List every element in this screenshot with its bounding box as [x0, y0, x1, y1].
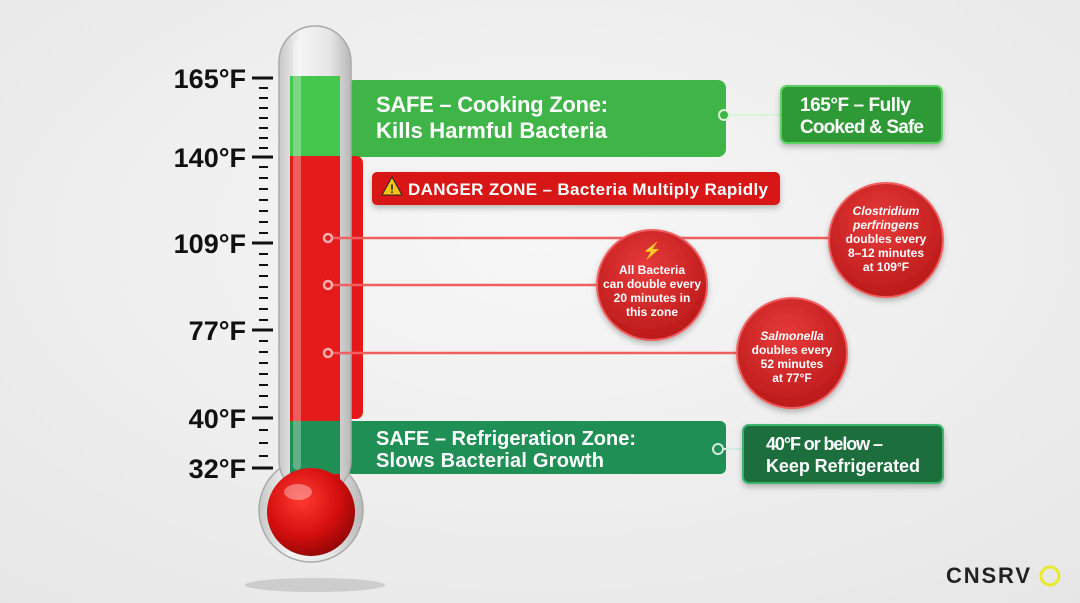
thermometer scale labels: 109°F — [174, 229, 246, 259]
callout: 40F keep refrigerated: 40°F or below – — [766, 434, 883, 454]
thermometer scale labels — [174, 64, 246, 484]
callout circle: Clostridium: at 109°F — [863, 260, 909, 274]
thermometer scale labels: 40°F — [189, 404, 246, 434]
callout circle: all bacteria: All Bacteria — [619, 263, 685, 277]
callout circle: all bacteria — [597, 230, 707, 340]
callout circle: all bacteria: ⚡ — [642, 241, 662, 260]
callout: 165F fully cooked: Cooked & Safe — [800, 117, 924, 138]
callout: 40F keep refrigerated — [743, 425, 943, 483]
callout circle: Salmonella: at 77°F — [772, 371, 812, 385]
callout circle: all bacteria: this zone — [626, 305, 678, 319]
thermometer ticks — [252, 78, 273, 468]
danger zone label: ! — [390, 182, 394, 196]
callout circle: Clostridium: perfringens — [852, 218, 919, 232]
callout circle: all bacteria: can double every — [603, 277, 701, 291]
panel: danger zone strip — [330, 156, 363, 419]
panel: safe cooking zone band: Kills Harmful Bacteria — [376, 118, 608, 143]
callout circle: Clostridium — [829, 183, 943, 297]
callout: 165F fully cooked — [781, 86, 942, 143]
callout circle: Salmonella: 52 minutes — [761, 357, 824, 371]
connector lines — [324, 234, 830, 357]
callout: 165F fully cooked: 165°F – Fully — [800, 95, 911, 116]
callout: 40F keep refrigerated: Keep Refrigerated — [766, 456, 920, 476]
thermometer scale labels: 32°F — [189, 454, 246, 484]
thermometer scale labels: 77°F — [189, 316, 246, 346]
callout circle: Salmonella — [737, 298, 847, 408]
callout circle: Clostridium: Clostridium — [853, 204, 920, 218]
callout circle: Salmonella: doubles every — [752, 343, 833, 357]
panel: safe cooking zone band: SAFE – Cooking Zone: — [376, 92, 608, 117]
callout circle: all bacteria: 20 minutes in — [614, 291, 690, 305]
callout circle: Clostridium: 8–12 minutes — [848, 246, 924, 260]
callout circle: Salmonella: Salmonella — [760, 329, 824, 343]
danger zone label: DANGER ZONE – Bacteria Multiply Rapidly — [408, 180, 769, 199]
panel: safe refrigeration band: SAFE – Refrigeration Zone: — [376, 428, 636, 450]
thermometer scale labels: 140°F — [174, 143, 246, 173]
panel: safe refrigeration band: Slows Bacterial Growth — [376, 450, 604, 472]
panel: safe cooking zone band — [346, 80, 782, 157]
thermometer scale labels: 165°F — [174, 64, 246, 94]
danger zone label — [372, 172, 780, 205]
callout circle: Clostridium: doubles every — [846, 232, 927, 246]
logo: CNSRV — [946, 563, 1030, 588]
panel: safe refrigeration band — [346, 421, 744, 474]
thermometer — [245, 26, 385, 592]
